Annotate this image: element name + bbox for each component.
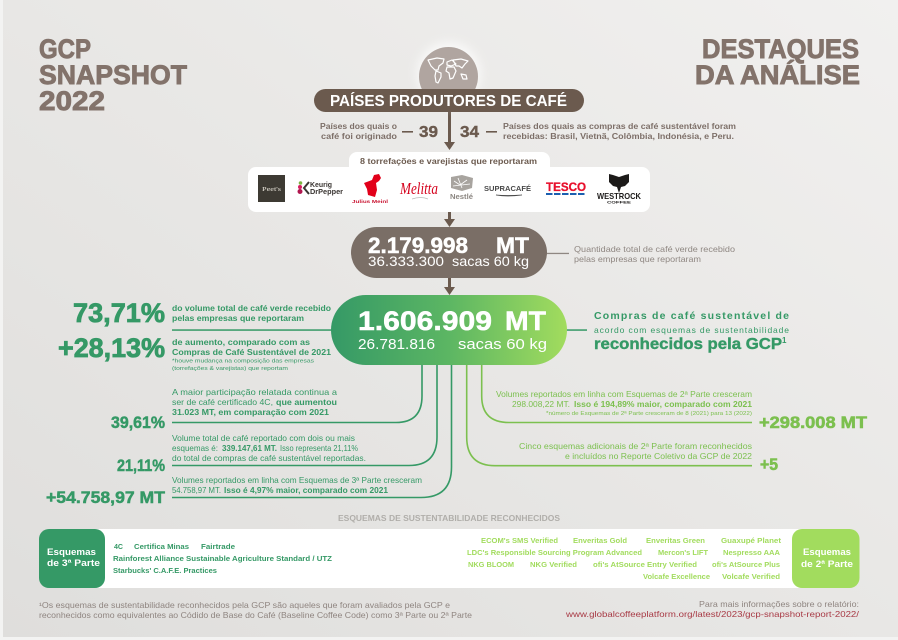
callout: recognised by GCP <box>594 310 789 353</box>
stat: 21,11% multiple schemes: esquemas é: <box>172 443 218 453</box>
title: GCP Snapshot 2022: GCP <box>39 34 91 64</box>
title: GCP Snapshot 2022: 2022 <box>39 86 105 116</box>
stat: +54.758,97 MT third-party: 54.758,97 MT. <box>172 485 221 495</box>
list: third-party schemes: Rainforest Alliance Sustainable Agriculture Standard / UTZ <box>113 554 333 563</box>
box: second-party schemes: de 2ª Parte <box>801 559 853 570</box>
pill: total green coffee volume: sacas 60 kg <box>452 253 529 269</box>
label: roasters and retailers: 8 torrefações e varejistas que reportaram <box>360 156 537 166</box>
stat: +28,13%: de aumento, comparado com as <box>172 337 310 347</box>
callout: recognised by GCP: Compras de café sustentável de <box>594 310 789 322</box>
footnote: ¹Os esquemas de sustentabilidade reconhecidos pela GCP são aqueles que foram avaliados pela GCP e <box>39 600 450 610</box>
list: second-party schemes: ECOM's SMS Verified <box>481 536 558 545</box>
title: GCP Snapshot 2022 <box>39 34 187 116</box>
pill: total green coffee volume <box>351 227 547 278</box>
stat: 21,11% multiple schemes: Volume total de café reportado com dois ou mais <box>172 433 355 443</box>
footnote <box>39 600 472 620</box>
annotation: total quantity received <box>547 244 735 264</box>
pill: total green coffee volume: 36.333.300 <box>368 253 444 269</box>
panel: roasters and retailers logos <box>248 152 650 212</box>
list: third-party schemes <box>113 542 333 575</box>
stat: 39,61% 4C share: 39,61% <box>111 413 165 432</box>
stat: 39,61% 4C share: 31.023 MT, em comparação com 2021 <box>172 407 329 417</box>
stat: 39 countries of origin: Países dos quais o <box>320 122 397 131</box>
stat: 21,11% multiple schemes: Isso representa 21,11% <box>280 443 359 453</box>
stat: 39,61% 4C share: A maior participação relatada continua a <box>172 387 337 397</box>
pill: total green coffee volume: 2.179.998 <box>368 233 468 258</box>
stat: +54.758,97 MT third-party: Volumes reportados em linha com Esquemas de 3ª Parte cresceram <box>172 475 422 485</box>
logo: Tesco: TESCO <box>546 182 586 194</box>
list: second-party schemes: Enveritas Green <box>646 536 705 545</box>
stat: 21,11% multiple schemes: 339.147,61 MT. <box>222 443 277 453</box>
stat: 39 countries of origin <box>320 122 438 141</box>
connector lines from green pill <box>172 329 752 498</box>
heading pill: Países produtores de café <box>314 89 584 112</box>
list: second-party schemes: LDC's Responsible Sourcing Program Advanced <box>467 548 642 557</box>
source link: www.globalcoffeeplatform.org/latest/2023/gcp-snapshot-report-2022/ <box>565 609 860 619</box>
stat: 39,61% 4C share: que aumentou <box>276 397 337 407</box>
stat: +28,13%: (torrefações & varejistas) que reportam <box>172 366 288 372</box>
stat: 73,71%: pelas empresas que reportaram <box>172 313 304 323</box>
stat: +5 additional schemes: +5 <box>760 455 778 474</box>
box: third-party schemes <box>39 529 105 588</box>
stat: 39 countries of origin: café foi originado <box>321 132 397 141</box>
callout: recognised by GCP: 1 <box>782 336 787 345</box>
stat: 39 countries of origin: 39 <box>419 124 438 141</box>
title: Destaques da Análise: DESTAQUES <box>702 34 859 64</box>
stat: +5 additional schemes <box>519 441 778 474</box>
logo: Julius Meinl <box>352 174 388 204</box>
logo: Westrock Coffee: WESTROCK <box>597 191 642 201</box>
source link <box>565 599 860 619</box>
title: GCP Snapshot 2022: SNAPSHOT <box>39 60 187 90</box>
logo: Peet's: Peet's <box>262 186 282 193</box>
logo: Keurig Dr Pepper <box>298 180 343 196</box>
list: third-party schemes: Certifica Minas <box>134 542 189 551</box>
list: second-party schemes: ofi's AtSource Entry Verified <box>593 560 698 569</box>
stat: +298.008 MT second-party: Volumes reportados em linha com Esquemas de 2ª Parte cresceram <box>496 389 752 399</box>
stat: 73,71% <box>73 298 331 328</box>
logo: Melitta: Melitta <box>399 179 438 198</box>
stat: 34 countries of sustainable purchases: 34 <box>460 124 479 141</box>
pill: sustainable coffee purchases: 1.606.909 <box>358 306 492 336</box>
box: second-party schemes: Esquemas <box>803 547 851 558</box>
stat: +28,13% <box>58 333 331 372</box>
stat: +54.758,97 MT third-party <box>46 475 422 507</box>
stat: +54.758,97 MT third-party: +54.758,97 MT <box>46 488 166 507</box>
logo: Peet's <box>258 175 285 202</box>
stat: +5 additional schemes: e incluídos no Reporte Coletivo da GCP de 2022 <box>565 451 752 461</box>
stat: +28,13%: Compras de Café Sustentável de 2021 <box>172 347 331 357</box>
list: second-party schemes <box>467 536 782 581</box>
stat: +298.008 MT second-party <box>496 389 868 432</box>
box: third-party schemes: de 3ª Parte <box>47 558 100 569</box>
stat: +298.008 MT second-party: Isso é 194,89% maior, comparado com 2021 <box>574 399 752 409</box>
heading: recognised schemes: ESQUEMAS DE SUSTENTABILIDADE RECONHECIDOS <box>338 513 560 523</box>
logo: Julius Meinl: Julius Meinl <box>352 199 388 204</box>
stat: 34 countries of sustainable purchases <box>460 122 736 141</box>
stat: 73,71%: do volume total de café verde recebido <box>172 303 331 313</box>
stat: +28,13%: +28,13% <box>58 333 165 363</box>
source link: Para mais informações sobre o relatório: <box>699 599 859 609</box>
stat: +28,13%: *houve mudança na composição das empresas <box>172 358 314 364</box>
stat: 21,11% multiple schemes: do total de compras de café sustentável reportadas. <box>172 453 366 463</box>
title: Destaques da Análise <box>695 34 860 90</box>
list: second-party schemes: NKG BLOOM <box>468 560 514 569</box>
logo: Keurig Dr Pepper: Keurig <box>310 180 332 189</box>
footnote: reconhecidos como equivalentes ao Códido de Base do Café (Baseline Coffee Code) como 3ª Parte ou 2ª Parte <box>39 610 472 620</box>
list: third-party schemes: Starbucks' C.A.F.E. Practices <box>113 566 217 575</box>
logo: Westrock Coffee: COFFEE <box>607 200 632 204</box>
pill: sustainable coffee purchases: MT <box>505 306 547 336</box>
stat: 34 countries of sustainable purchases: recebidas: Brasil, Vietnã, Colômbia, Indonésia, e Peru. <box>503 132 734 141</box>
stat: +298.008 MT second-party: *número de Esquemas de 2ª Parte cresceram de 8 (2021) para 13 (2022) <box>546 410 752 417</box>
stat: 21,11% multiple schemes <box>117 433 366 475</box>
panel: recognised schemes list <box>39 529 860 588</box>
logo: Westrock Coffee <box>597 174 642 204</box>
arrow: total volume to sustainable purchases <box>444 278 455 295</box>
list: second-party schemes: Enveritas Gold <box>573 536 627 545</box>
stat: 21,11% multiple schemes: 21,11% <box>117 456 165 475</box>
logo: Nestlé: Nestlé <box>450 194 473 201</box>
list: second-party schemes: Mercon's LIFT <box>658 548 708 557</box>
list: third-party schemes: 4C <box>114 542 124 551</box>
list: second-party schemes: Nespresso AAA <box>723 548 781 557</box>
arrow: roasters to total volume <box>444 212 455 227</box>
stat: +298.008 MT second-party: 298.008,22 MT. <box>512 399 570 409</box>
pill: sustainable coffee purchases: 26.781.816 <box>358 336 435 353</box>
pill: total green coffee volume: MT <box>496 233 530 258</box>
icon: world map in circle <box>417 42 481 106</box>
box: second-party schemes <box>792 529 860 588</box>
title: Destaques da Análise: DA ANÁLISE <box>695 59 860 90</box>
stat: 34 countries of sustainable purchases: Países dos quais as compras de café sustentável foram <box>503 122 736 131</box>
annotation: total quantity received: pelas empresas que reportaram <box>574 254 701 264</box>
stat: 73,71%: 73,71% <box>73 298 165 328</box>
pill: sustainable coffee purchases: sacas 60 kg <box>458 336 547 353</box>
pill: sustainable coffee purchases <box>331 295 567 365</box>
logo: Nestlé <box>450 175 473 201</box>
list: third-party schemes: Fairtrade <box>201 542 235 551</box>
annotation: total quantity received: Quantidade total de café verde recebido <box>574 244 735 254</box>
heading pill: Países produtores de café: PAÍSES PRODUTORES DE CAFÉ <box>330 91 567 110</box>
stat: 39,61% 4C share <box>111 387 337 432</box>
stat: +54.758,97 MT third-party: Isso é 4,97% maior, comparado com 2021 <box>224 485 388 495</box>
logo: Supracafé: SUPRACAFÉ <box>484 184 531 193</box>
list: second-party schemes: Volcafe Verified <box>722 572 781 581</box>
stat: +298.008 MT second-party: +298.008 MT <box>759 413 868 432</box>
box: third-party schemes: Esquemas <box>47 547 96 558</box>
list: second-party schemes: ofi's AtSource Plus <box>712 560 780 569</box>
list: second-party schemes: Guaxupé Planet <box>721 536 782 545</box>
list: second-party schemes: Volcafe Excellence <box>643 572 710 581</box>
stat: 39,61% 4C share: ser de café certificado 4C, <box>172 397 273 407</box>
logo: Keurig Dr Pepper: DrPepper <box>310 187 343 196</box>
callout: recognised by GCP: reconhecidos pela GCP <box>594 336 782 353</box>
arrow: producing countries to roasters <box>444 110 455 150</box>
list: second-party schemes: NKG Verified <box>530 560 577 569</box>
callout: recognised by GCP: acordo com esquemas de sustentabilidade <box>594 325 789 335</box>
stat: +5 additional schemes: Cinco esquemas adicionais de 2ª Parte foram reconhecidos <box>519 441 752 451</box>
